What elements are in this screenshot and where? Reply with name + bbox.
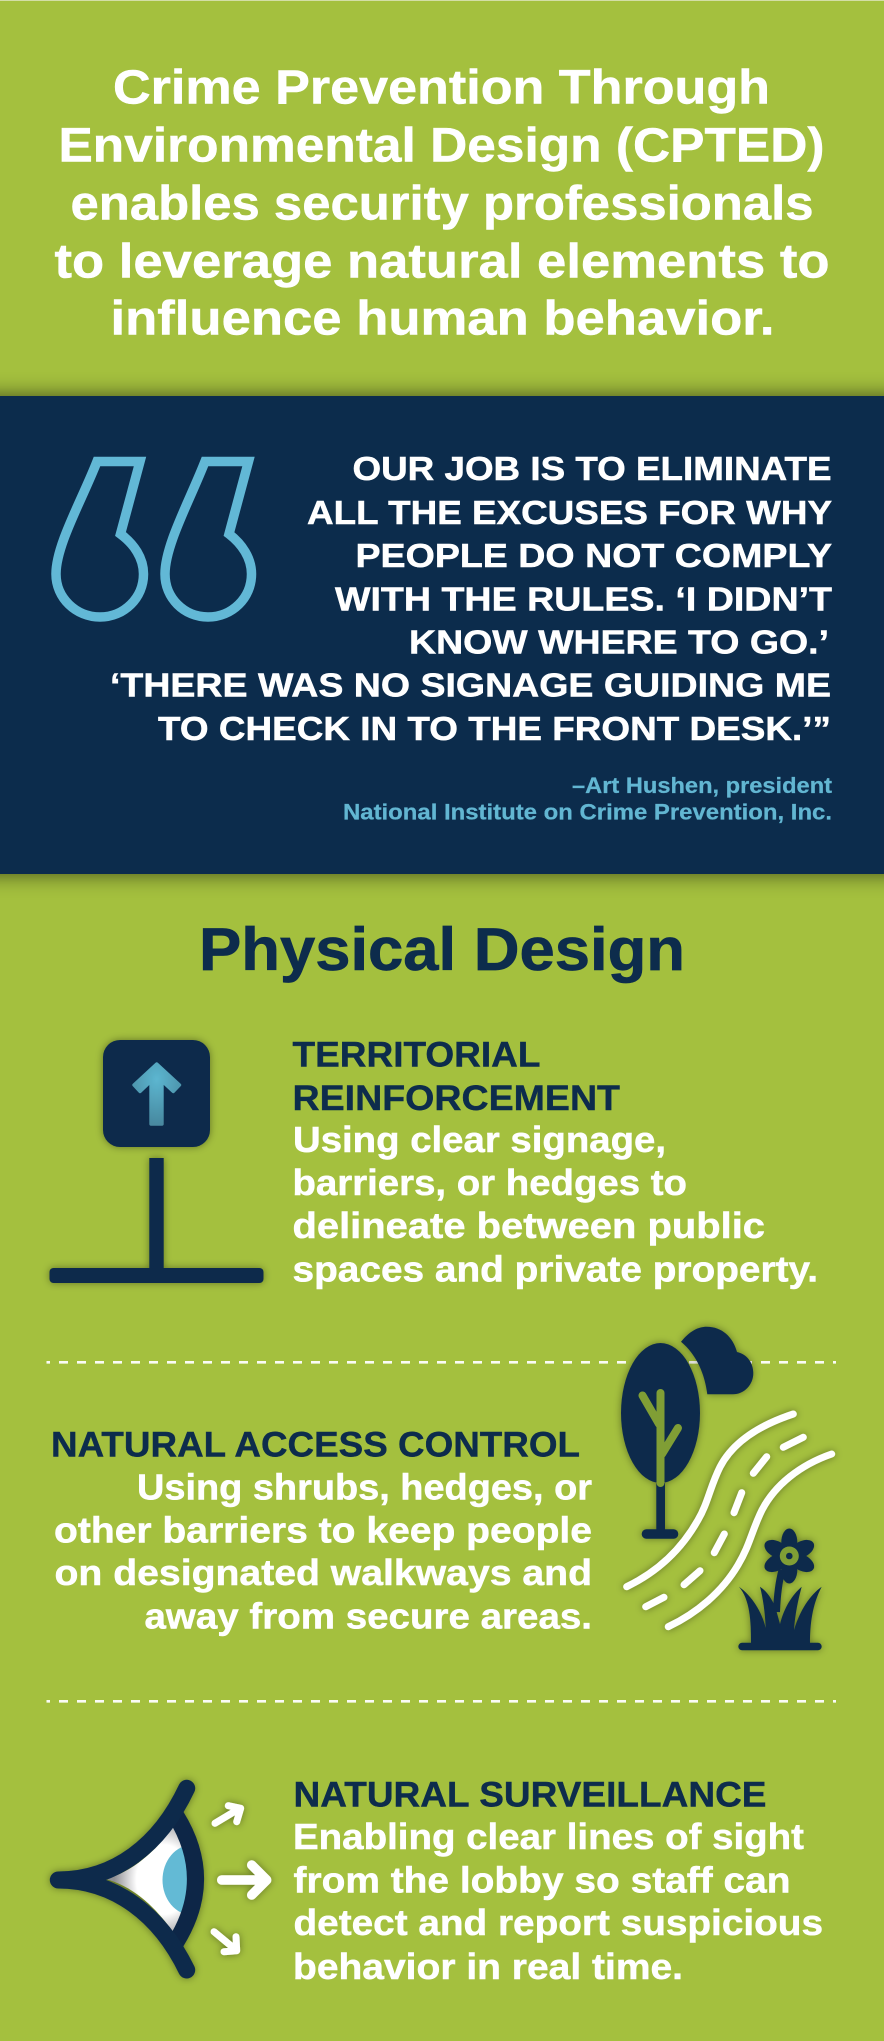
quote text: PEOPLE DO NOT COMPLY bbox=[356, 538, 832, 575]
description: delineate between public bbox=[292, 1205, 765, 1246]
subheading: REINFORCEMENT bbox=[292, 1079, 620, 1118]
text: natural surveillance bbox=[293, 1776, 823, 1987]
description: Enabling clear lines of sight bbox=[293, 1816, 804, 1857]
text: territorial reinforcement bbox=[292, 1036, 818, 1290]
quote text: KNOW WHERE TO GO.’ bbox=[409, 624, 829, 662]
quote text: ‘THERE WAS NO SIGNAGE GUIDING ME bbox=[110, 668, 831, 704]
quote text: WITH THE RULES. ‘I DIDN’T bbox=[335, 582, 833, 618]
description: away from secure areas. bbox=[144, 1596, 592, 1636]
icon: bush bbox=[681, 1327, 753, 1394]
subheading: NATURAL ACCESS CONTROL bbox=[51, 1426, 580, 1464]
quote attribution: National Institute on Crime Prevention, Inc. bbox=[343, 800, 832, 824]
description: spaces and private property. bbox=[292, 1248, 818, 1290]
quote attribution bbox=[343, 773, 833, 824]
quote text: TO CHECK IN TO THE FRONT DESK.’” bbox=[158, 711, 831, 748]
icon: sight arrows bbox=[214, 1806, 267, 1952]
description: behavior in real time. bbox=[293, 1946, 683, 1987]
title: to leverage natural elements to bbox=[54, 234, 830, 288]
description: other barriers to keep people bbox=[54, 1510, 592, 1550]
title: Environmental Design (CPTED) bbox=[58, 118, 824, 172]
title bbox=[54, 60, 830, 346]
title: Crime Prevention Through bbox=[113, 60, 770, 114]
quote attribution: –Art Hushen, president bbox=[572, 773, 833, 798]
description: Using clear signage, bbox=[293, 1119, 666, 1160]
icon: road bbox=[627, 1414, 832, 1627]
quote text: ALL THE EXCUSES FOR WHY bbox=[307, 495, 832, 532]
text: natural access control bbox=[51, 1426, 592, 1636]
title: enables security professionals bbox=[70, 176, 814, 230]
heading: Physical Design: Physical Design bbox=[199, 916, 685, 983]
panel shadow bbox=[0, 396, 884, 874]
icon: quotation marks bbox=[56, 462, 252, 617]
quote text bbox=[110, 451, 833, 748]
icon: tree, path and flower bbox=[621, 1327, 832, 1650]
icon: sign post bbox=[50, 1040, 264, 1283]
title: influence human behavior. bbox=[110, 292, 774, 346]
panel: quote bbox=[0, 396, 884, 874]
icon: eye bbox=[58, 1788, 221, 1970]
icon: flower and grass bbox=[738, 1528, 822, 1650]
description: from the lobby so staff can bbox=[294, 1860, 790, 1900]
description bbox=[293, 1816, 823, 1987]
description: on designated walkways and bbox=[54, 1552, 592, 1593]
subheading: NATURAL SURVEILLANCE bbox=[294, 1776, 766, 1814]
description: barriers, or hedges to bbox=[292, 1162, 687, 1203]
icon: up arrow bbox=[134, 1064, 180, 1124]
description bbox=[292, 1119, 818, 1290]
description bbox=[54, 1466, 592, 1636]
description: detect and report suspicious bbox=[294, 1902, 823, 1943]
icon: tree bbox=[621, 1343, 700, 1539]
icon: eye with arrows bbox=[58, 1788, 267, 1970]
subheading: TERRITORIAL bbox=[292, 1036, 540, 1074]
subheading bbox=[292, 1036, 620, 1118]
description: Using shrubs, hedges, or bbox=[137, 1466, 592, 1508]
quote text: OUR JOB IS TO ELIMINATE bbox=[352, 451, 832, 488]
